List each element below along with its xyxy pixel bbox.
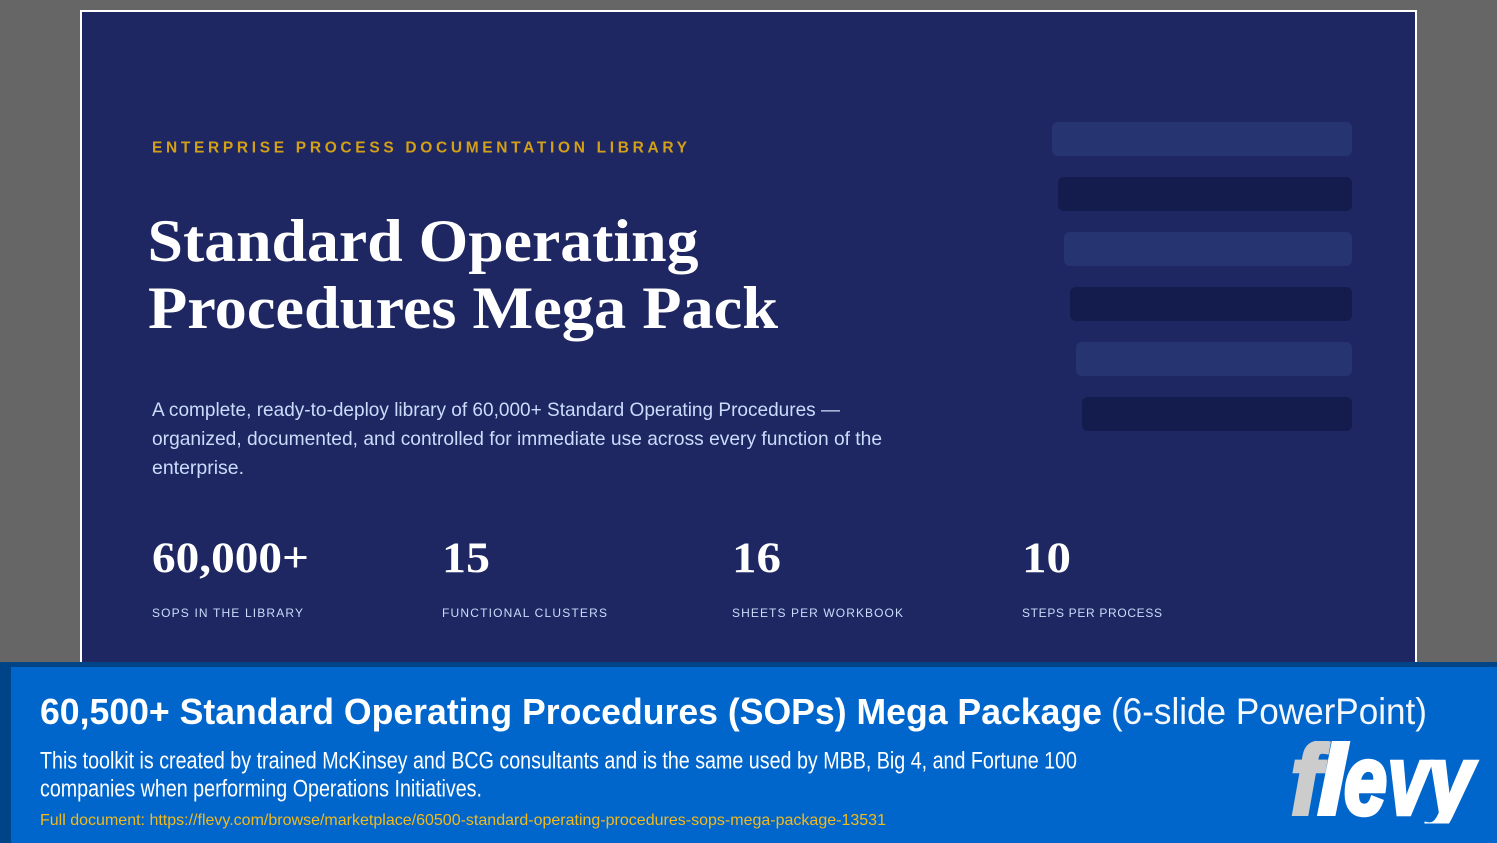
stat: functional clusters bbox=[442, 535, 607, 620]
stat: sheets per workbook: SHEETS PER WORKBOOK bbox=[732, 606, 903, 620]
banner heading: 60,500+ Standard Operating Procedures (SOPs) Mega Package bbox=[40, 691, 1102, 732]
title bbox=[148, 208, 779, 341]
logo: flevy: f bbox=[1291, 725, 1329, 835]
title: Standard Operating bbox=[148, 208, 698, 274]
eyebrow label: ENTERPRISE PROCESS DOCUMENTATION LIBRARY bbox=[152, 140, 688, 156]
stat: steps per process: STEPS PER PROCESS bbox=[1022, 606, 1162, 620]
stat: sheets per workbook bbox=[732, 535, 903, 620]
stat: SOPs in the library bbox=[152, 535, 309, 620]
logo: flevy bbox=[1292, 741, 1480, 824]
banner heading suffix: (6-slide PowerPoint) bbox=[1111, 691, 1427, 732]
logo: flevy: l bbox=[1318, 725, 1348, 835]
stat: functional clusters: 15 bbox=[442, 535, 490, 582]
stat: steps per process: 10 bbox=[1022, 535, 1071, 582]
logo: flevy: y bbox=[1424, 725, 1477, 835]
stat: SOPs in the library: SOPS IN THE LIBRARY bbox=[152, 606, 303, 620]
logo: flevy: e bbox=[1344, 725, 1387, 835]
logo: flevy: v bbox=[1388, 725, 1431, 835]
banner description: companies when performing Operations Initiatives. bbox=[40, 776, 482, 802]
description text bbox=[152, 399, 882, 479]
title: Procedures Mega Pack bbox=[148, 275, 779, 341]
description text: enterprise. bbox=[152, 457, 244, 479]
stat: SOPs in the library: 60,000+ bbox=[152, 535, 309, 582]
description text: organized, documented, and controlled for immediate use across every function of the bbox=[152, 428, 882, 450]
stat: functional clusters: FUNCTIONAL CLUSTERS bbox=[442, 606, 607, 620]
decorative stacked bars bbox=[1052, 122, 1352, 431]
description text: A complete, ready-to-deploy library of 60,000+ Standard Operating Procedures — bbox=[152, 399, 840, 421]
panel: navy slide bbox=[81, 11, 1416, 671]
banner description bbox=[40, 748, 1077, 802]
document link: Full document: https://flevy.com/browse/marketplace/60500-standard-operating-procedures-sops-mega-package-13531 bbox=[40, 812, 886, 829]
banner: document footer bbox=[0, 662, 1497, 843]
banner description: This toolkit is created by trained McKinsey and BCG consultants and is the same used by MBB, Big 4, and Fortune 100 bbox=[40, 748, 1077, 774]
stat: sheets per workbook: 16 bbox=[732, 535, 781, 582]
stat: steps per process bbox=[1022, 535, 1162, 620]
